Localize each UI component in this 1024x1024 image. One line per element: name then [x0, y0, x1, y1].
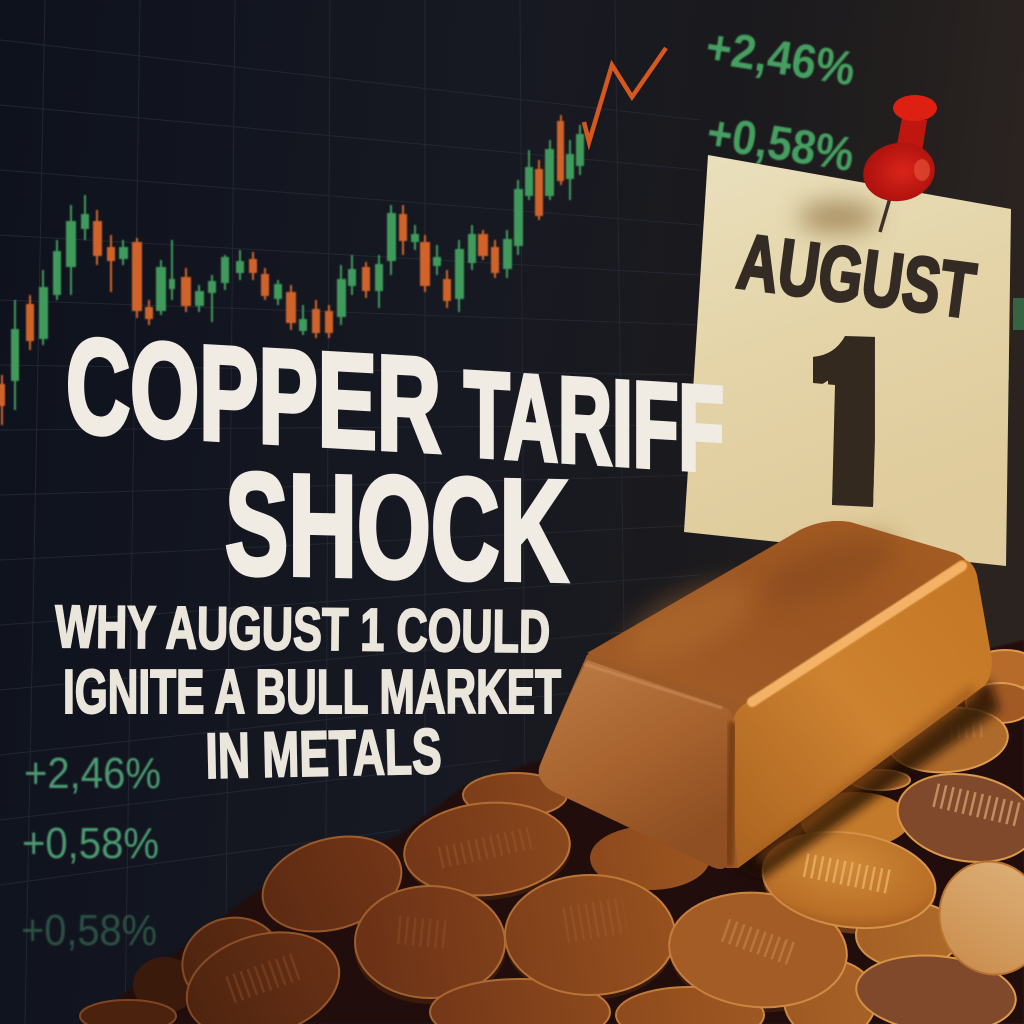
title: COPPER [66, 311, 441, 481]
arrow line [584, 48, 666, 142]
pile of pennies [80, 640, 1024, 1024]
title: TARIFF [464, 345, 724, 497]
icon: red push pin [859, 95, 939, 232]
top percentages [702, 21, 859, 182]
lower left percentages: +0,58% [21, 906, 157, 955]
day number: 1 [779, 288, 912, 556]
bar edge highlight [752, 566, 962, 702]
candlestick chart [0, 115, 583, 425]
top percentages: +0,58% [703, 107, 858, 182]
title [66, 311, 724, 612]
lower left percentages: +2,46% [24, 749, 161, 798]
subtitle: IN METALS [205, 715, 442, 792]
coin reliefs [230, 730, 1020, 990]
lower left percentages: +0,58% [22, 819, 159, 868]
title: SHOCK [225, 443, 568, 612]
lower left percentages [21, 749, 161, 955]
calendar note [684, 155, 1011, 566]
chart fragment at right edge [1007, 298, 1024, 380]
subtitle: WHY AUGUST 1 COULD [55, 593, 551, 665]
copper bar [539, 521, 1000, 880]
top percentages: +2,46% [702, 21, 859, 96]
subtitle [55, 593, 561, 792]
coin thickness [354, 799, 942, 1020]
subtitle: IGNITE A BULL MARKET [63, 658, 561, 727]
